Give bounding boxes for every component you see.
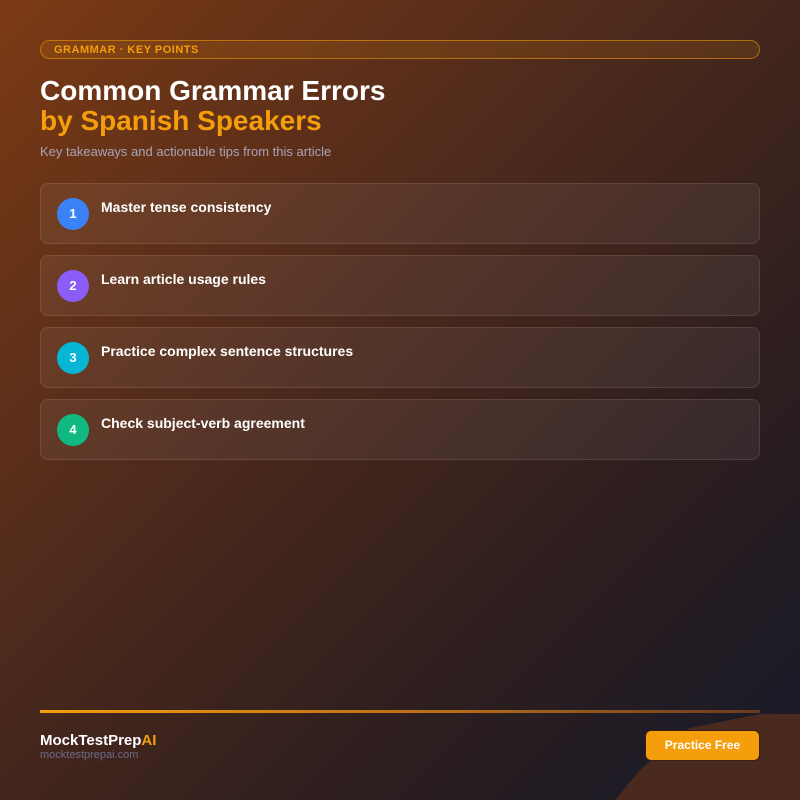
title highlight: by Spanish Speakers bbox=[40, 105, 322, 136]
card 3: Practice complex sentence structures bbox=[101, 343, 353, 359]
card 4: 4 bbox=[69, 422, 77, 437]
brand bbox=[40, 732, 156, 761]
divider line bbox=[40, 710, 760, 713]
brand: MockTestPrepAI bbox=[40, 732, 156, 749]
button bbox=[645, 730, 760, 761]
badge: GRAMMAR · KEY POINTS bbox=[54, 44, 199, 56]
card 2: 2 bbox=[69, 278, 77, 293]
card 4: Check subject-verb agreement bbox=[101, 415, 305, 431]
title: Common Grammar Errors bbox=[40, 75, 385, 106]
subtitle: Key takeaways and actionable tips from this article bbox=[40, 144, 331, 159]
card 1: 1 bbox=[69, 206, 77, 221]
card 1 bbox=[40, 183, 760, 244]
card 2: Learn article usage rules bbox=[101, 271, 266, 287]
card 3 bbox=[40, 327, 760, 388]
card 3: 3 bbox=[69, 350, 77, 365]
button: Practice Free bbox=[665, 738, 740, 752]
card 1: Master tense consistency bbox=[101, 199, 271, 215]
brand: mocktestprepai.com bbox=[40, 749, 138, 761]
badge bbox=[40, 40, 760, 59]
card 4 bbox=[40, 399, 760, 460]
card 2 bbox=[40, 255, 760, 316]
